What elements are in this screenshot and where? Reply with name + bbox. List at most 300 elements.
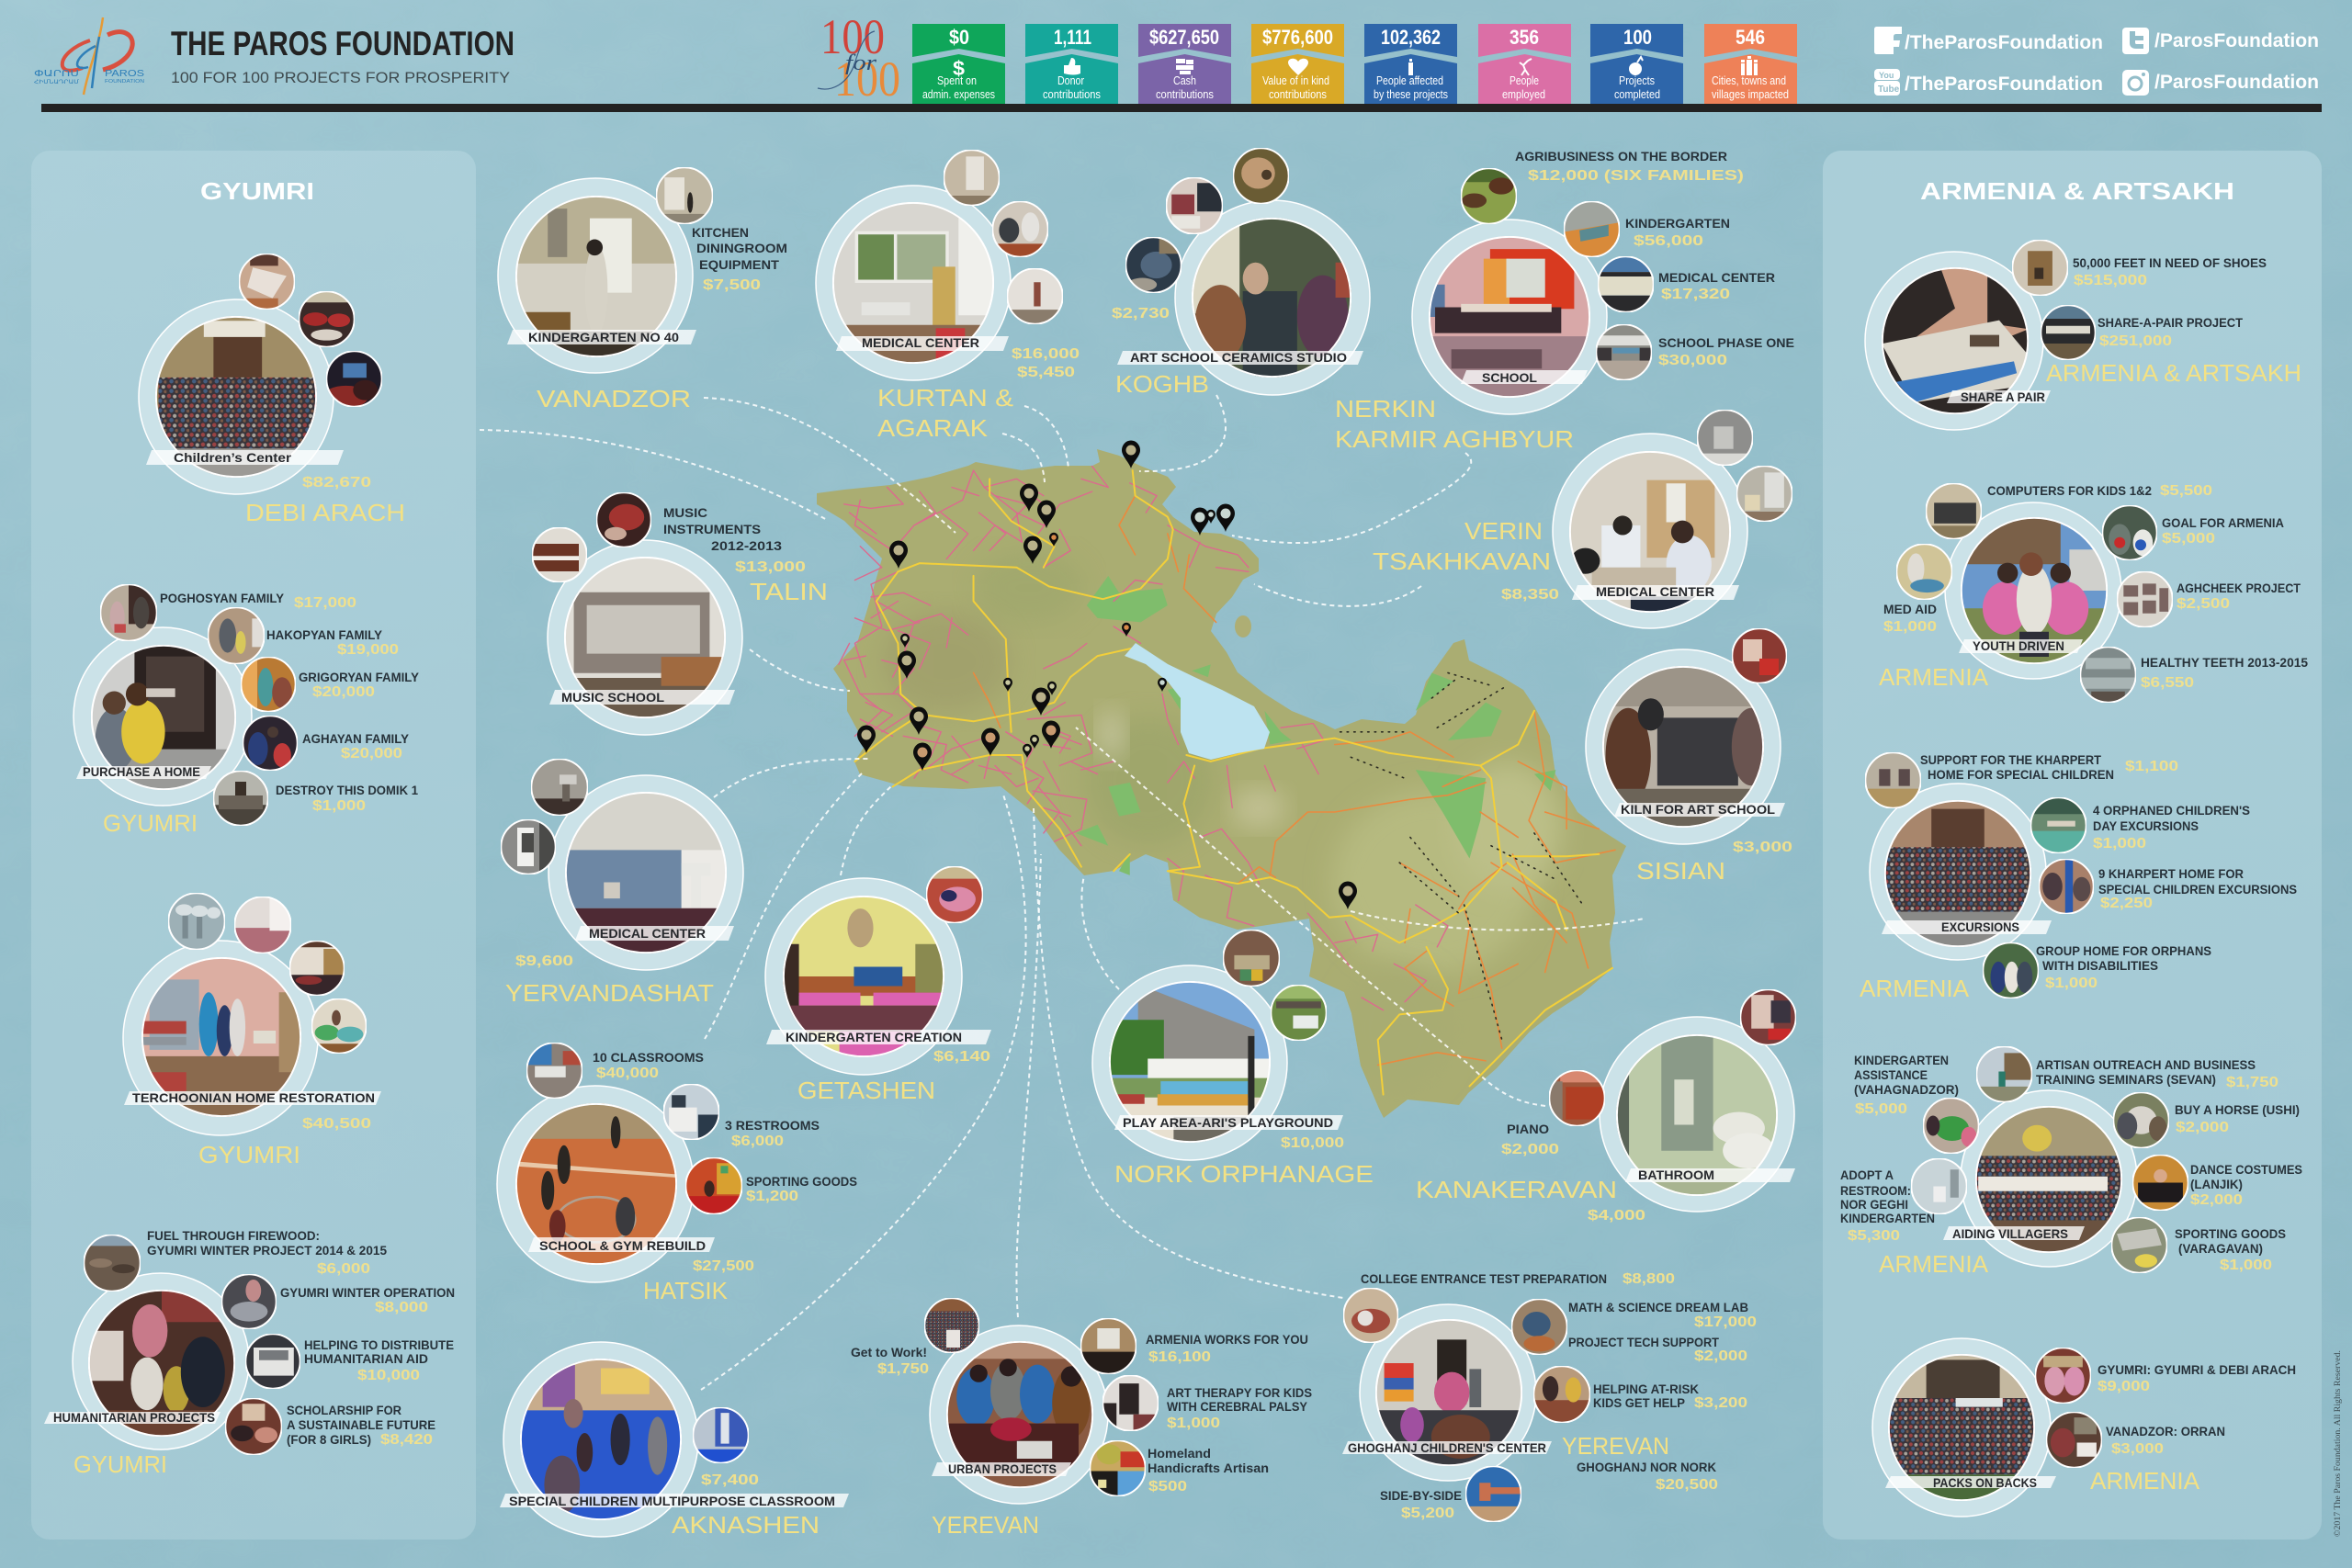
photo: foot on shoe template	[1882, 267, 2029, 414]
cluster: Kiln for Art School, Sisian	[1586, 628, 1792, 885]
logo: 100 for 100: 100	[834, 51, 900, 107]
item: art therapy	[1167, 1386, 1312, 1431]
item: orphaned children: $1,000	[2093, 836, 2146, 852]
cluster: Medical Center, Kurtan and Agarak	[816, 150, 1080, 442]
stat tile: people affected: People affected	[1376, 73, 1443, 87]
item: artisan outreach: $1,750	[2226, 1075, 2278, 1090]
photo: sporting goods	[2111, 1217, 2167, 1273]
stat tile: projects completed: completed	[1614, 87, 1660, 101]
caption: URBAN PROJECTS	[948, 1461, 1057, 1476]
photo: upright piano	[532, 527, 587, 582]
caption banner	[1572, 585, 1739, 600]
social: youtube: Tube	[1878, 85, 1900, 95]
item: healthy teeth	[2141, 656, 2308, 691]
item: Kharpert excursions: 9 KHARPERT HOME FOR	[2098, 867, 2244, 881]
photo: medical center building	[1598, 256, 1654, 312]
caption: SPECIAL CHILDREN MULTIPURPOSE CLASSROOM	[509, 1494, 835, 1508]
item: project tech support: $2,000	[1694, 1348, 1747, 1364]
cluster: Share a Pair, Armenia and Artsakh	[1865, 240, 2301, 430]
photo: goal for Armenia boys	[2102, 505, 2157, 560]
item: firewood: GYUMRI WINTER PROJECT 2014 & 2015	[147, 1244, 387, 1258]
photo: shoes shop	[2012, 240, 2068, 296]
item: humanitarian aid: HUMANITARIAN AID	[304, 1352, 428, 1366]
caption banner	[146, 450, 344, 465]
item: school phase one: $30,000	[1658, 353, 1727, 368]
item: kitchen equipment: EQUIPMENT	[699, 258, 780, 272]
item: group home: GROUP HOME FOR ORPHANS	[2036, 944, 2211, 958]
caption banner	[1114, 1115, 1343, 1130]
item: Destroy this Domik: $1,000	[312, 798, 366, 814]
caption banner	[507, 330, 696, 344]
item: computers for kids: $5,500	[2160, 483, 2212, 499]
location	[1373, 517, 1551, 575]
item: side by side: $5,200	[1401, 1506, 1454, 1521]
cluster: Urban Projects, Yerevan	[851, 1298, 1312, 1539]
amount: $9,600	[515, 953, 573, 969]
item: Hakopyan: $19,000	[337, 642, 399, 658]
item: Kharpert excursions: $2,250	[2100, 896, 2153, 911]
location: TALIN	[750, 578, 828, 605]
item: get to work	[851, 1346, 929, 1377]
item: winter operation	[280, 1286, 455, 1315]
item: adopt a restroom	[1840, 1168, 1935, 1244]
item: scholarship: SCHOLARSHIP FOR	[287, 1404, 401, 1417]
stat tile: donor contributions: 1,111	[1054, 26, 1091, 49]
location: VERIN	[1464, 517, 1543, 545]
item: restrooms: 3 RESTROOMS	[725, 1119, 820, 1133]
photo: blue-walled room	[565, 792, 727, 953]
item: adopt a restroom: ADOPT A	[1840, 1168, 1894, 1182]
item: buy a horse	[2175, 1103, 2300, 1135]
item: homeland handicrafts	[1148, 1447, 1269, 1495]
cluster: Ghoghanj Children's Center, Yerevan	[1342, 1271, 1757, 1522]
item: Gyumri and Debi Arach	[2098, 1363, 2296, 1394]
item: restrooms	[725, 1119, 820, 1149]
item: piano: $2,000	[1501, 1142, 1559, 1157]
item: medical center: $17,320	[1661, 287, 1730, 302]
cluster: Bathroom, Kanakeravan	[1416, 989, 1796, 1224]
social: instagram	[2122, 70, 2319, 96]
caption banner	[766, 1030, 991, 1044]
cluster: Excursions, Armenia	[1860, 752, 2297, 1002]
item: kindergarten assistance: ASSISTANCE	[1854, 1068, 1928, 1082]
caption: KILN FOR ART SCHOOL	[1621, 802, 1775, 817]
item: Grigoryan: $20,000	[312, 684, 375, 700]
item: group home: $1,000	[2045, 976, 2098, 991]
item: Aghcheek project: $2,500	[2177, 596, 2230, 612]
stat tile: spent on admin: Spent on	[937, 73, 977, 87]
stat tile: value of in kind: $776,600	[1262, 26, 1333, 49]
item: kitchen equipment	[692, 226, 787, 293]
map of Armenia and Artsakh	[817, 449, 1626, 1118]
item: at-risk kids: HELPING AT-RISK	[1593, 1382, 1699, 1396]
location: GYUMRI	[198, 1141, 300, 1168]
photo: nurse room	[1736, 466, 1792, 522]
amount: $4,000	[1588, 1208, 1645, 1224]
item: Grigoryan	[299, 671, 419, 700]
caption banner	[1959, 639, 2083, 653]
item: Destroy this Domik: DESTROY THIS DOMIK 1	[276, 784, 418, 797]
item: side by side	[1380, 1489, 1462, 1521]
caption banner	[1461, 370, 1588, 384]
cluster: School and Gym Rebuild, Hatsik	[497, 1043, 857, 1304]
item: homeland handicrafts: $500	[1148, 1479, 1187, 1495]
item: Aghcheek project: AGHCHEEK PROJECT	[2177, 581, 2301, 595]
photo: room	[289, 941, 345, 996]
photo: boys at door	[91, 645, 236, 790]
item: math and science: $17,000	[1694, 1314, 1757, 1330]
caption banner	[1625, 1168, 1795, 1182]
stat tile: people affected	[1364, 24, 1457, 104]
photo: women at table	[946, 1341, 1093, 1488]
item: kitchen equipment: $7,500	[703, 277, 761, 293]
item: Ghoghanj Nor Nork: GHOGHANJ NOR NORK	[1577, 1461, 1716, 1474]
item: kindergarten assistance	[1854, 1054, 1959, 1117]
photo: patient and doctor	[992, 201, 1048, 257]
stat tile: value of in kind: Value of in kind	[1262, 73, 1329, 87]
item: classrooms: 10 CLASSROOMS	[593, 1051, 704, 1065]
caption: SCHOOL & GYM REBUILD	[539, 1238, 706, 1253]
subtitle: 100 FOR 100 PROJECTS FOR PROSPERITY	[171, 69, 510, 86]
cluster: Purchase a Home, Gyumri	[74, 584, 419, 837]
item: music instruments: 2012-2013	[711, 539, 783, 553]
item: project tech support: PROJECT TECH SUPPORT	[1568, 1336, 1720, 1349]
caption banner	[1614, 803, 1785, 817]
item: Kharpert support	[1920, 753, 2178, 782]
caption: AIDING VILLAGERS	[1952, 1226, 2068, 1241]
item: goal for Armenia	[2162, 516, 2284, 547]
logo: Paros Foundation: FOUNDATION	[105, 79, 144, 85]
cluster: Humanitarian Projects, Gyumri	[44, 1229, 455, 1478]
photo: domik	[213, 771, 268, 826]
item: project tech support	[1568, 1336, 1747, 1364]
photo: playground	[1109, 981, 1271, 1143]
header black rule	[41, 104, 2322, 112]
photo: school dining hall	[1429, 236, 1590, 398]
photo: piano interior	[564, 557, 726, 718]
item: classrooms: $40,000	[596, 1066, 659, 1081]
location: ARMENIA	[2090, 1467, 2200, 1495]
logo: Paros Foundation	[34, 17, 144, 95]
caption: KINDERGARTEN CREATION	[786, 1030, 962, 1044]
photo: horse	[2113, 1092, 2169, 1148]
item: Gyumri and Debi Arach: $9,000	[2098, 1379, 2150, 1394]
item: kindergarten assistance: (VAHAGNADZOR)	[1854, 1083, 1959, 1097]
stat tile: projects completed: 100	[1623, 26, 1652, 49]
item: healthy teeth: $6,550	[2141, 675, 2194, 691]
photo: dream lab	[1511, 1299, 1567, 1355]
item: Armenia works: ARMENIA WORKS FOR YOU	[1146, 1333, 1308, 1347]
item: side by side: SIDE-BY-SIDE	[1380, 1489, 1462, 1503]
photo: at-risk kids	[1533, 1366, 1590, 1423]
item: scholarship: (FOR 8 GIRLS)	[287, 1433, 371, 1447]
heading: Gyumri panel: GYUMRI	[200, 177, 314, 205]
photo: blue play floor	[520, 1359, 682, 1520]
item: kindergarten: KINDERGARTEN	[1625, 217, 1730, 231]
cluster: Ari's Playground, Nork Orphanage	[1092, 930, 1374, 1188]
photo: sink room	[531, 759, 588, 816]
photo: computers	[1926, 483, 1982, 539]
photo: students with art	[1732, 628, 1787, 683]
amount: $3,000	[1733, 840, 1792, 855]
item: scholarship: A SUSTAINABLE FUTURE	[287, 1418, 435, 1432]
amounts: $16,000	[1012, 346, 1080, 362]
copyright notice: ©2017 The Paros Foundation. All Rights Reserved.	[2333, 1350, 2343, 1537]
caption banner	[932, 1462, 1071, 1476]
photo: children at table	[926, 866, 983, 923]
item: classrooms	[593, 1051, 704, 1081]
stat tile: projects completed: Projects	[1619, 73, 1655, 87]
location: KARMIR AGHBYUR	[1335, 425, 1574, 453]
item: art therapy: WITH CEREBRAL PALSY	[1167, 1400, 1307, 1414]
map terrain shading	[882, 551, 1562, 1093]
photo: classroom	[526, 1043, 582, 1099]
item: med aid: MED AID	[1883, 603, 1937, 616]
photo: medical room	[832, 202, 994, 364]
cluster: Kindergarten No 40, Vanadzor	[498, 167, 787, 412]
location: KURTAN &	[877, 384, 1013, 412]
logo: Paros Foundation: ՓԱՐՈՍ	[34, 69, 79, 79]
photo: gym	[515, 1103, 677, 1265]
item: adopt a restroom: NOR GEGHI	[1840, 1198, 1908, 1212]
item: scholarship	[287, 1404, 435, 1448]
stat tile: people employed: People	[1510, 73, 1539, 87]
item: computers for kids: COMPUTERS FOR KIDS 1&2	[1987, 484, 2152, 498]
photo: students	[1125, 237, 1182, 293]
stat tile: cities towns villages	[1704, 24, 1797, 104]
item: 50,000 feet: $515,000	[2074, 273, 2147, 288]
photo: Aghcheek project	[2117, 571, 2173, 627]
photo: computer room	[326, 351, 382, 407]
item: Vanadzor Orran: $3,000	[2111, 1441, 2164, 1457]
item: Hakopyan	[266, 628, 399, 658]
photo: school phase one	[1596, 324, 1652, 380]
item: Vanadzor Orran	[2106, 1425, 2225, 1457]
social: youtube: /TheParosFoundation	[1905, 73, 2103, 95]
social: facebook	[1874, 27, 2103, 54]
photo: side by side hands	[1465, 1466, 1521, 1522]
caption: SHARE A PAIR	[1961, 389, 2045, 404]
cluster: Aiding Villagers, Armenia	[1840, 1046, 2302, 1278]
amount: $40,500	[302, 1116, 371, 1132]
photo: share-a-pair crowd	[2041, 305, 2096, 360]
stat tile: cities towns villages: villages impacted	[1712, 87, 1789, 101]
location: TSAKHKAVAN	[1373, 547, 1551, 575]
location: KOGHB	[1115, 370, 1209, 398]
cluster: Medical Center, Verin Tsakhkavan	[1373, 410, 1792, 628]
photo: children in class	[299, 291, 355, 347]
caption banner	[124, 1091, 381, 1105]
location	[1335, 395, 1574, 453]
photo: family	[88, 1290, 235, 1437]
caption banner	[1943, 1226, 2085, 1240]
photo: winter operation	[221, 1274, 277, 1329]
caption: SCHOOL	[1482, 370, 1537, 385]
item: adopt a restroom: RESTROOM:	[1840, 1184, 1911, 1198]
stat tile: donor contributions: Donor	[1057, 73, 1085, 87]
amounts: $5,450	[1017, 365, 1075, 380]
location	[877, 384, 1013, 442]
location: YERVANDASHAT	[505, 979, 714, 1007]
item: orphaned children: 4 ORPHANED CHILDREN'S	[2093, 804, 2250, 818]
caption: KINDERGARTEN NO 40	[528, 330, 679, 344]
item: Poghosyan: $17,000	[294, 595, 356, 611]
item: music instruments	[663, 506, 806, 575]
stat tile: projects completed	[1590, 24, 1683, 104]
item: Armenia works	[1146, 1333, 1308, 1365]
item: buy a horse: BUY A HORSE (USHI)	[2175, 1103, 2300, 1117]
item: dance costumes: $2,000	[2190, 1192, 2243, 1208]
item: orphaned children	[2093, 804, 2250, 852]
cluster: Terchoonian Home Restoration, Gyumri	[123, 893, 381, 1168]
item: Kharpert excursions	[2098, 867, 2297, 911]
photo: dance costumes	[2132, 1155, 2188, 1211]
caption banner	[44, 1412, 220, 1424]
caption: MEDICAL CENTER	[862, 335, 979, 350]
photo: med aid	[1896, 544, 1952, 600]
item: sporting goods: $1,200	[746, 1189, 798, 1204]
item: Gyumri and Debi Arach: GYUMRI: GYUMRI & DEBI ARACH	[2098, 1363, 2296, 1377]
item: at-risk kids: KIDS GET HELP	[1593, 1396, 1685, 1410]
photo: artisan outreach	[1976, 1046, 2032, 1102]
cluster: Medical Center, Yervandashat	[501, 759, 743, 1007]
photo: cows	[1461, 168, 1517, 224]
cluster: Children's Center, Debi Arach	[139, 254, 405, 526]
logo: 100 for 100: for	[845, 51, 877, 75]
stat tile: value of in kind	[1251, 24, 1344, 104]
caption: PLAY AREA-ARI'S PLAYGROUND	[1123, 1115, 1333, 1130]
photo: kiln delivery	[1602, 666, 1770, 828]
stat tile: cash contributions: Cash	[1173, 73, 1196, 87]
amount: $82,670	[302, 475, 371, 491]
location: GYUMRI	[103, 809, 198, 837]
location: AGARAK	[877, 414, 989, 442]
item: math and science	[1568, 1301, 1757, 1330]
photo: handicrafts	[1090, 1440, 1146, 1496]
location: ARMENIA & ARTSAKH	[2046, 359, 2301, 387]
photo: blue room	[693, 1407, 749, 1463]
stat tile: cash contributions	[1138, 24, 1231, 104]
cluster: Youth Driven, Armenia	[1879, 483, 2308, 703]
photo: children's center entrance	[1375, 1319, 1522, 1466]
location: HATSIK	[643, 1277, 729, 1304]
caption banner	[1882, 920, 2052, 934]
item: firewood: $6,000	[317, 1261, 370, 1277]
item: music instruments: MUSIC	[663, 506, 707, 520]
stat tile: people employed	[1478, 24, 1571, 104]
logo: 100 for 100: 100	[820, 9, 885, 64]
item: at-risk kids	[1593, 1382, 1747, 1411]
photo: van	[245, 1334, 300, 1389]
photo: Armenia works for you	[1080, 1318, 1136, 1374]
photo: doctor and patient	[1569, 451, 1731, 613]
stat tile: people employed: 356	[1510, 26, 1539, 49]
photo: hands with clay	[1233, 148, 1289, 204]
item: dance costumes: DANCE COSTUMES	[2190, 1163, 2302, 1177]
item: orphaned children: DAY EXCURSIONS	[2093, 819, 2199, 833]
item: kindergarten assistance: $5,000	[1855, 1101, 1907, 1117]
item: Armenia works: $16,100	[1148, 1349, 1211, 1365]
item: group home	[2036, 944, 2211, 991]
photo: musician	[596, 492, 651, 547]
location: NORK ORPHANAGE	[1114, 1160, 1374, 1188]
logo: Paros Foundation: PAROS	[105, 69, 144, 79]
item: art therapy: ART THERAPY FOR KIDS	[1167, 1386, 1312, 1400]
social: twitter	[2122, 28, 2319, 54]
item: medical center: MEDICAL CENTER	[1658, 271, 1775, 285]
photo: sinks	[168, 893, 225, 950]
photo: get to work class	[924, 1298, 979, 1353]
photo: children with backpacks	[1888, 1354, 2035, 1501]
caption: TERCHOONIAN HOME RESTORATION	[132, 1090, 375, 1105]
cluster: Art School Ceramics Studio, Koghb	[1112, 148, 1370, 398]
stat tile: cities towns villages: 546	[1736, 26, 1765, 49]
item: get to work: Get to Work!	[851, 1346, 927, 1359]
photo: room with person	[656, 167, 713, 224]
item: art therapy: $1,000	[1167, 1416, 1220, 1431]
item: Kharpert support: $1,100	[2125, 759, 2178, 774]
item: 50,000 feet	[2073, 256, 2267, 288]
item: artisan outreach: TRAINING SEMINARS (SEVAN)	[2036, 1073, 2216, 1087]
caption banner	[549, 690, 735, 705]
stat tile: cash contributions: $627,650	[1149, 26, 1219, 49]
photo: restroom	[1911, 1158, 1967, 1214]
photo: Poghosyan family	[100, 584, 157, 641]
stat tile: donor contributions: contributions	[1043, 87, 1101, 101]
photo: Kharpert excursions	[2039, 859, 2094, 914]
item: sporting goods: SPORTING GOODS	[746, 1175, 857, 1189]
item: buy a horse: $2,000	[2176, 1120, 2229, 1135]
caption banner	[1117, 351, 1363, 365]
social: instagram: /ParosFoundation	[2154, 72, 2319, 93]
location: GETASHEN	[797, 1077, 935, 1104]
stat tile: spent on admin: $	[953, 57, 965, 80]
location: VANADZOR	[537, 385, 691, 412]
stat tile: spent on admin	[912, 24, 1005, 104]
caption: PACKS ON BACKS	[1933, 1475, 2037, 1490]
amount: $27,500	[693, 1258, 754, 1274]
logo: 100 for 100	[818, 9, 900, 107]
item: Poghosyan: POGHOSYAN FAMILY	[160, 592, 284, 605]
location: SISIAN	[1636, 857, 1725, 885]
item: Aghcheek project	[2177, 581, 2301, 612]
location: GYUMRI	[74, 1450, 167, 1478]
caption: MEDICAL CENTER	[1596, 584, 1714, 599]
item: kindergarten: $56,000	[1634, 233, 1703, 249]
amount: $8,350	[1501, 587, 1559, 603]
cluster: Packs on Backs, Armenia	[1872, 1338, 2296, 1517]
item: humanitarian aid: $10,000	[357, 1368, 420, 1383]
caption: MEDICAL CENTER	[589, 926, 706, 941]
item: group home: WITH DISABILITIES	[2042, 959, 2158, 973]
photo: kitchen	[515, 196, 677, 357]
location: YEREVAN	[932, 1511, 1039, 1539]
caption: ART SCHOOL CERAMICS STUDIO	[1130, 350, 1347, 365]
item: Poghosyan	[160, 592, 356, 611]
item: college entrance test: $8,800	[1623, 1271, 1675, 1287]
social: twitter: /ParosFoundation	[2154, 30, 2319, 51]
caption banner	[528, 1237, 715, 1252]
item: Kharpert support: SUPPORT FOR THE KHARPERT	[1920, 753, 2102, 767]
photo: medical corridor	[944, 150, 1000, 206]
photo: college entrance preparation	[1343, 1288, 1398, 1343]
item: Aghayan	[302, 732, 409, 761]
item: share-a-pair project: SHARE-A-PAIR PROJECT	[2098, 316, 2244, 330]
location: ARMENIA	[1879, 663, 1989, 691]
item: med aid	[1883, 603, 1937, 635]
cluster: Special Children Multipurpose Classroom, Aknashen	[500, 1342, 849, 1539]
item: goal for Armenia: GOAL FOR ARMENIA	[2162, 516, 2284, 530]
